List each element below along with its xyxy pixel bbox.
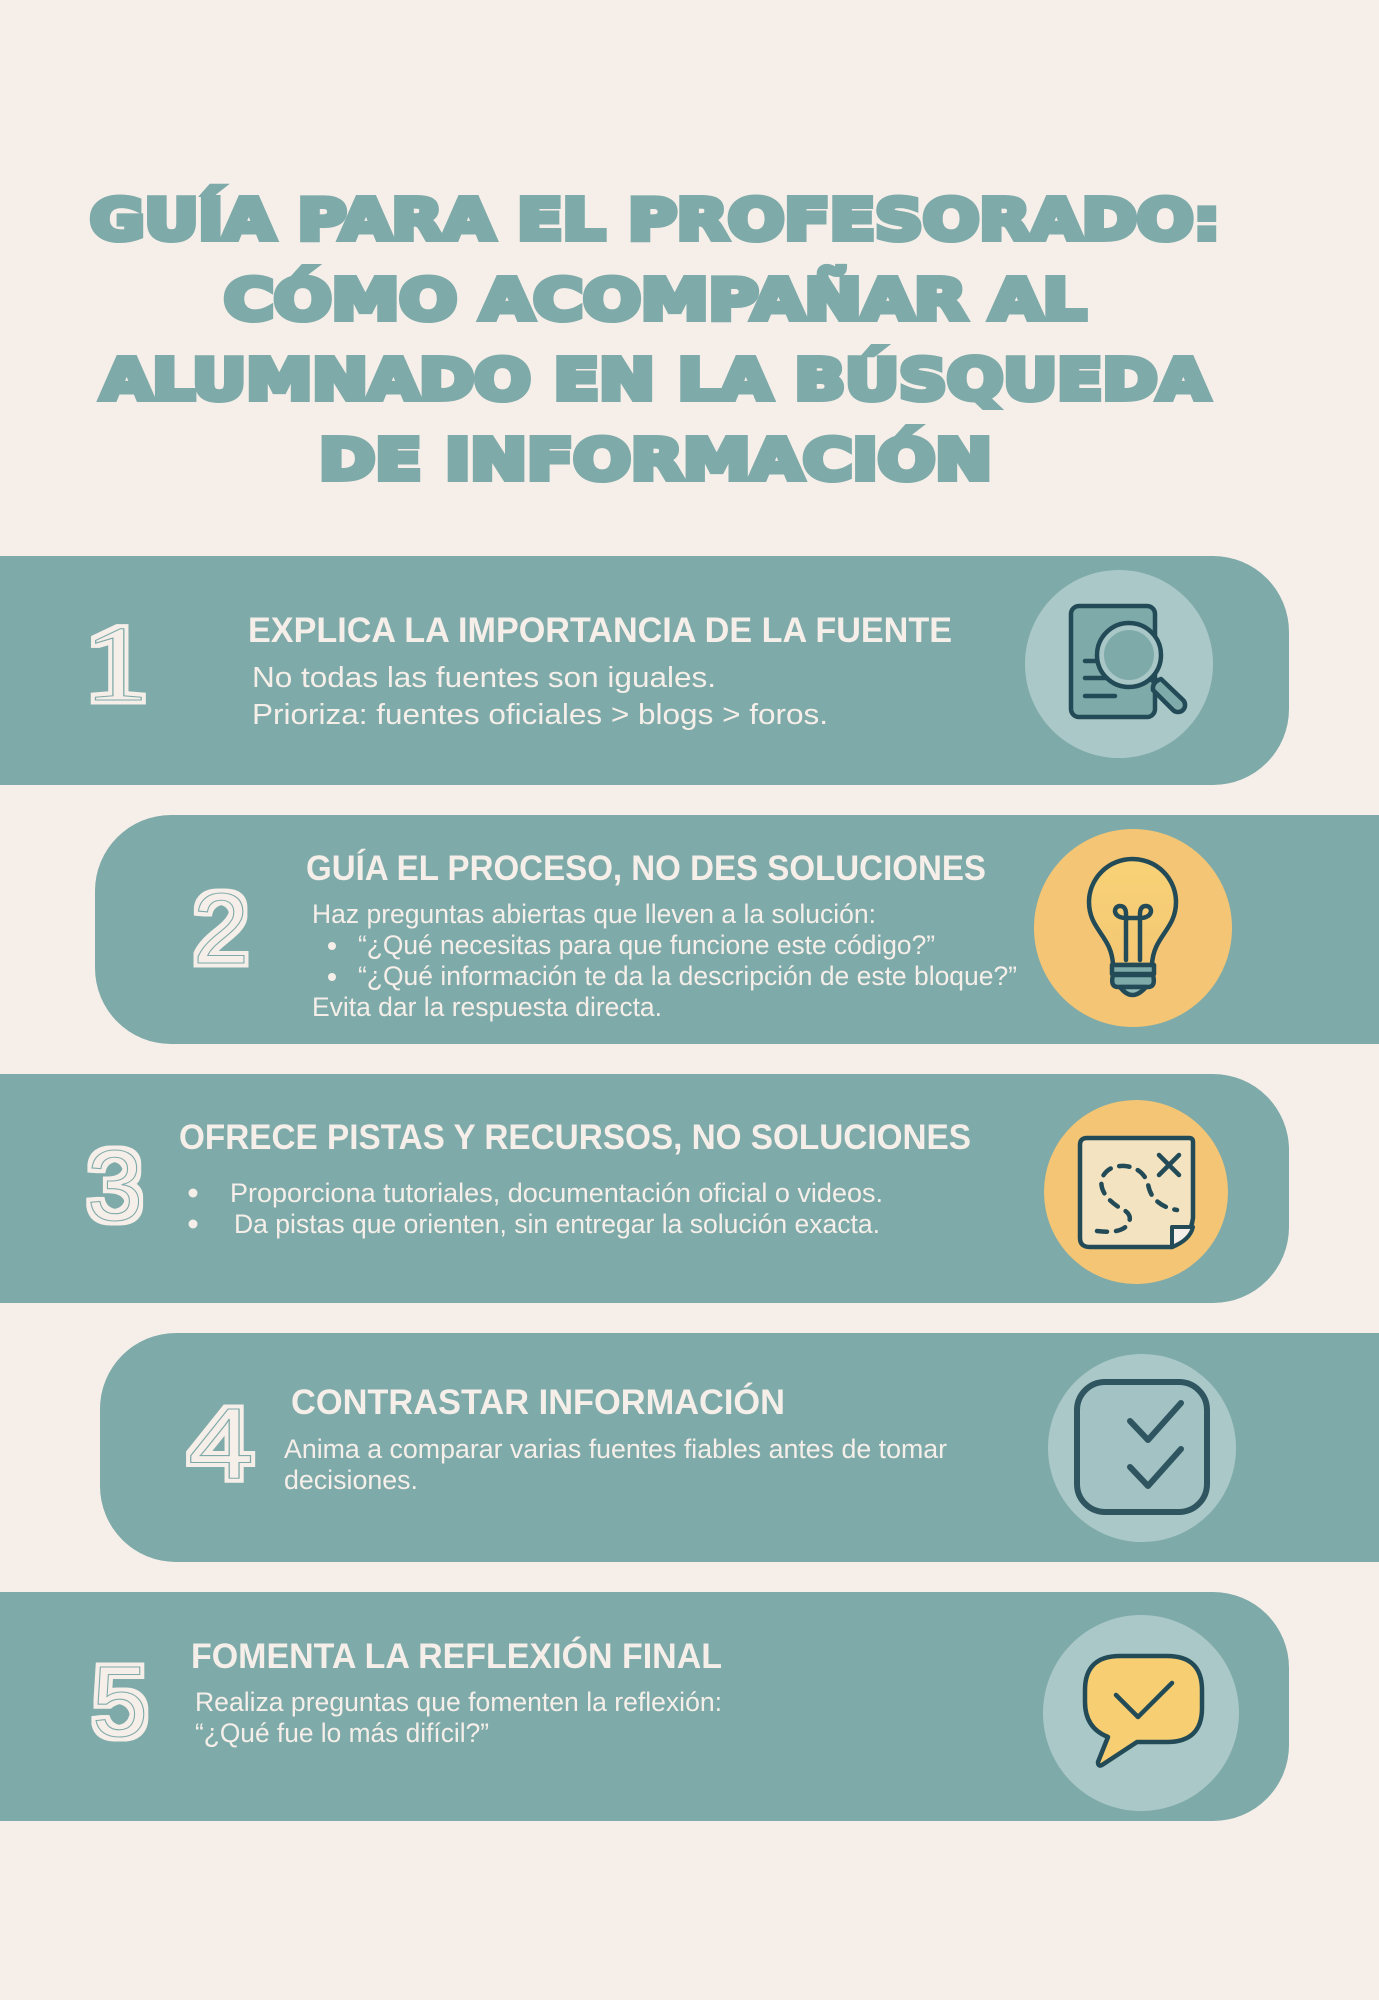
title: ALUMNADO EN LA BÚSQUEDA: [101, 348, 1210, 413]
number 2: 2: [193, 873, 249, 985]
panel: step 3: [0, 1074, 1289, 1303]
panel: step 4: [100, 1333, 1379, 1562]
number 3: 3: [87, 1130, 143, 1242]
text: step 3: Proporciona tutoriales, documentación oficial o videos.: [230, 1178, 883, 1208]
text: step 3: Da pistas que orienten, sin entregar la solución exacta.: [234, 1209, 880, 1239]
panel: step 5: [0, 1592, 1289, 1821]
text: step 2: Evita dar la respuesta directa.: [312, 992, 662, 1022]
heading: step 3: OFRECE PISTAS Y RECURSOS, NO SOLUCIONES: [179, 1118, 971, 1157]
text: step 4: decisiones.: [284, 1465, 418, 1495]
heading: step 1: EXPLICA LA IMPORTANCIA DE LA FUENTE: [248, 611, 952, 650]
text: step 2: Haz preguntas abiertas que lleven a la solución:: [312, 899, 876, 929]
icon: speech bubble with check: [1043, 1615, 1239, 1811]
number 4: 4: [188, 1388, 254, 1500]
text: step 2: “¿Qué necesitas para que funcione este código?”: [358, 930, 935, 960]
heading: step 5: FOMENTA LA REFLEXIÓN FINAL: [191, 1636, 722, 1676]
text: step 2: [312, 899, 1017, 1022]
title: CÓMO ACOMPAÑAR AL: [224, 268, 1086, 333]
icon: checklist: [1048, 1354, 1236, 1542]
title: [90, 187, 1220, 493]
icon: treasure map: [1044, 1100, 1228, 1284]
text: step 5: [195, 1687, 722, 1748]
text: step 1: [252, 662, 828, 731]
text: step 4: Anima a comparar varias fuentes fiables antes de tomar: [284, 1434, 947, 1464]
number 1: 1: [84, 605, 149, 724]
panel: step 2: [95, 815, 1379, 1044]
text: step 5: “¿Qué fue lo más difícil?”: [195, 1718, 489, 1748]
number 5: 5: [92, 1646, 148, 1758]
text: step 3: [188, 1178, 883, 1239]
heading: step 4: CONTRASTAR INFORMACIÓN: [291, 1382, 785, 1422]
title: DE INFORMACIÓN: [319, 428, 992, 493]
panel: step 1: [0, 556, 1289, 785]
text: step 5: Realiza preguntas que fomenten la reflexión:: [195, 1687, 722, 1717]
text: step 2: “¿Qué información te da la descripción de este bloque?”: [358, 961, 1017, 991]
title: GUÍA PARA EL PROFESORADO:: [90, 187, 1220, 253]
text: step 1: Prioriza: fuentes oficiales > blogs > foros.: [252, 699, 828, 731]
text: step 1: No todas las fuentes son iguales.: [252, 662, 716, 694]
heading: step 2: GUÍA EL PROCESO, NO DES SOLUCIONES: [306, 848, 986, 888]
icon: document with magnifying glass: [1025, 570, 1213, 758]
icon: light bulb: [1034, 829, 1232, 1027]
text: step 4: [284, 1434, 947, 1495]
